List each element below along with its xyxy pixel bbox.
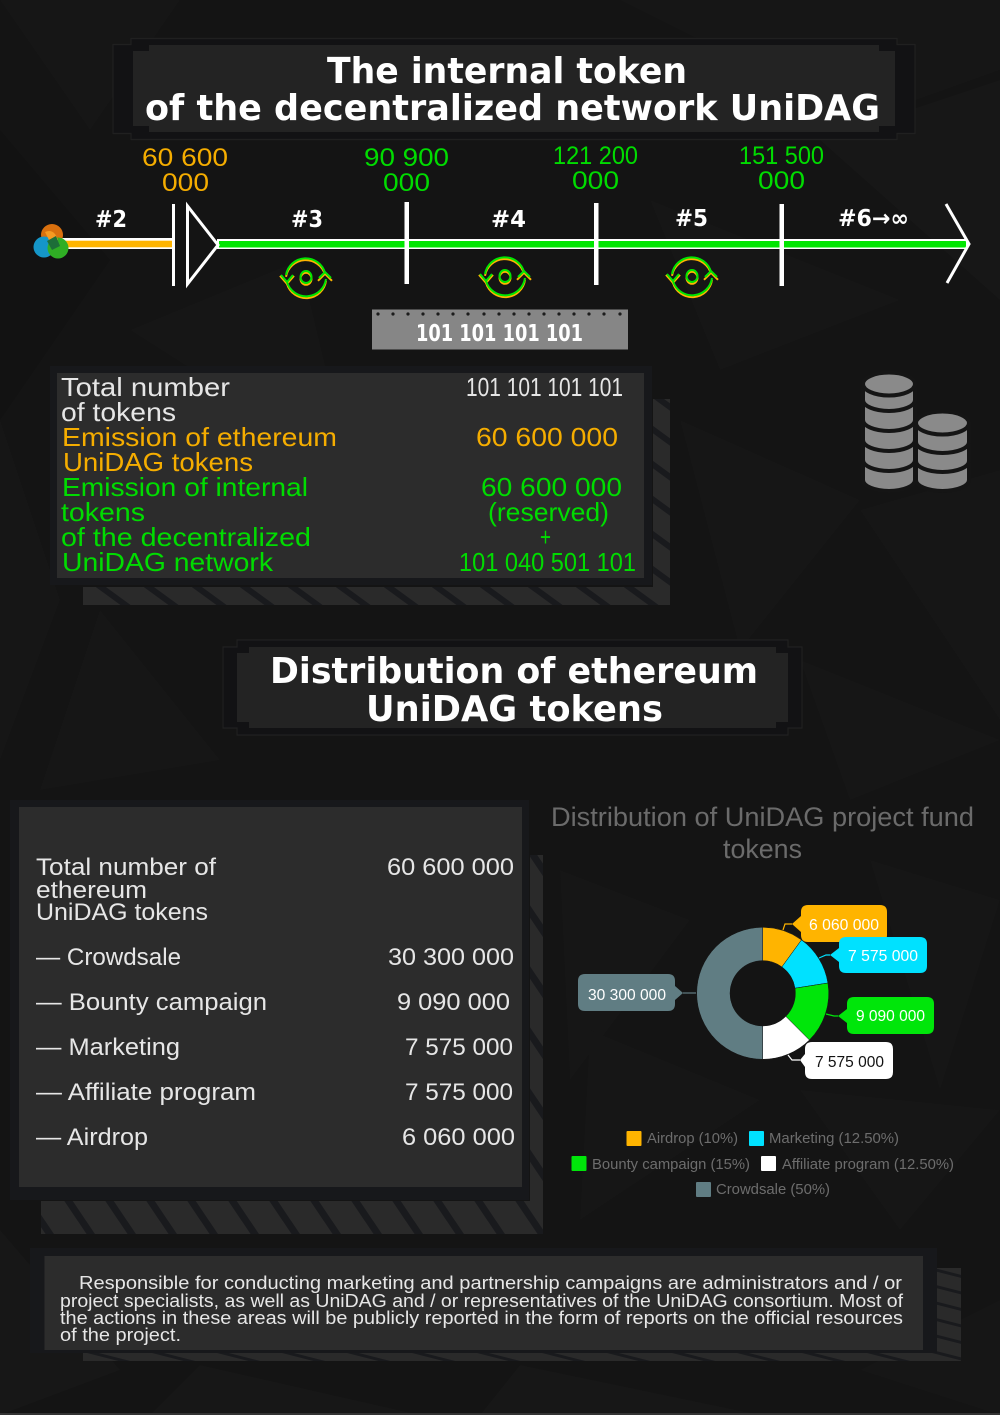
callout: bounty [826,997,934,1034]
callout: crowdsale: 30 300 000 [588,987,666,1004]
footnote text: the actions in these areas will be publicly reported in the form of reports on the official resources [60,1307,903,1328]
ethereum emission row: UniDAG tokens [63,447,253,477]
row labels: — Affiliate program [36,1079,256,1106]
chart title: tokens [723,834,802,864]
callout: bounty: 9 090 000 [856,1008,925,1025]
callout: affiliate [788,1042,893,1079]
milestone numbers: 000 [383,169,430,197]
ethereum emission row [62,422,618,477]
footnote text: of the project. [60,1324,181,1345]
total number row: Total number [61,372,230,402]
icon: arrow head [946,204,969,283]
row labels: Total number of [36,854,216,881]
title text [145,51,880,129]
internal emission row: of the decentralized [61,522,311,552]
milestone numbers: 151 500 [739,142,824,170]
internal emission row: tokens [61,497,145,527]
row labels: ethereum [36,877,147,904]
row labels: — Bounty campaign [36,989,267,1016]
stage labels: #4 [491,207,526,233]
row labels: UniDAG tokens [36,899,208,926]
title panel [113,38,915,140]
row values: 9 090 000 [397,989,510,1016]
icon: cycle 5 [666,257,718,297]
footnote text: project specialists, as well as UniDAG and / or representatives of the UniDAG consortium. Most of [60,1290,904,1311]
title text: of the decentralized network UniDAG [145,88,880,129]
milestone numbers: 000 [572,167,619,195]
total number row: 101 101 101 101 [466,372,623,402]
row values: 30 300 000 [388,944,514,971]
heading text [270,651,758,730]
chart legend [572,1130,954,1198]
orange line [60,238,172,249]
milestone numbers: 121 200 [553,142,638,170]
total supply tag: 101 101 101 101 [416,321,583,347]
donut chart [578,905,934,1079]
milestone numbers: 60 600 [142,144,228,172]
internal emission row: (reserved) [488,497,609,527]
row labels: — Marketing [36,1034,180,1061]
internal emission row: Emission of internal [62,472,308,502]
callout: crowdsale [578,974,696,1011]
legend: bounty: Bounty campaign (15%) [592,1156,750,1173]
row values [387,854,515,1151]
title text: The internal token [327,51,687,92]
milestone numbers: 000 [758,167,805,195]
icon: triangle marker [188,206,218,284]
row labels [36,854,267,1151]
timeline [34,142,969,298]
row labels: — Airdrop [36,1124,148,1151]
row values: 7 575 000 [405,1079,513,1106]
total number row: of tokens [61,397,176,427]
row values: 60 600 000 [387,854,514,881]
legend: airdrop: Airdrop (10%) [647,1130,738,1147]
total supply tag [372,310,628,350]
milestone numbers [142,142,824,197]
row values: 6 060 000 [402,1124,515,1151]
callout: airdrop [783,905,887,942]
heading panel [223,640,802,735]
heading text: Distribution of ethereum [270,651,758,692]
legend: crowdsale: Crowdsale (50%) [716,1181,830,1198]
icon: cycle 3 [280,258,332,298]
stage labels: #5 [675,206,708,232]
green line [217,239,968,249]
ethereum emission row: 60 600 000 [476,422,618,452]
internal emission row: UniDAG network [62,547,274,577]
callout: affiliate: 7 575 000 [815,1054,884,1071]
icon: coin stacks [863,372,969,491]
stage labels: #6→∞ [838,206,909,232]
separators [172,202,784,286]
internal emission row: 101 040 501 101 [459,547,636,577]
internal emission row: 60 600 000 [481,472,622,502]
internal emission row: + [540,522,551,552]
stage labels: #2 [95,207,127,233]
icon: logo [34,224,68,258]
callout: marketing [819,937,927,973]
panel: token totals [50,366,670,605]
heading text: UniDAG tokens [366,689,663,730]
row labels: — Crowdsale [36,944,181,971]
total number row [61,372,623,427]
stage labels: #3 [291,207,323,233]
footnote text [60,1272,904,1345]
callout: airdrop: 6 060 000 [809,917,879,934]
panel: distribution table [10,800,543,1234]
footnote text: Responsible for conducting marketing and partnership campaigns are administrators and / or [79,1272,902,1293]
milestone numbers: 90 900 [364,144,449,172]
chart title: Distribution of UniDAG project fund [551,802,974,832]
row values: 7 575 000 [405,1034,513,1061]
callout: marketing: 7 575 000 [848,948,918,965]
chart title [551,802,974,864]
panel: footnote [30,1248,961,1361]
icon: cycle 4 [479,257,531,297]
internal emission row [61,472,636,577]
milestone numbers: 000 [162,169,209,197]
ethereum emission row: Emission of ethereum [62,422,337,452]
stage labels [95,206,909,233]
legend: marketing: Marketing (12.50%) [769,1130,899,1147]
slices [697,927,829,1059]
legend: affiliate: Affiliate program (12.50%) [782,1156,954,1173]
